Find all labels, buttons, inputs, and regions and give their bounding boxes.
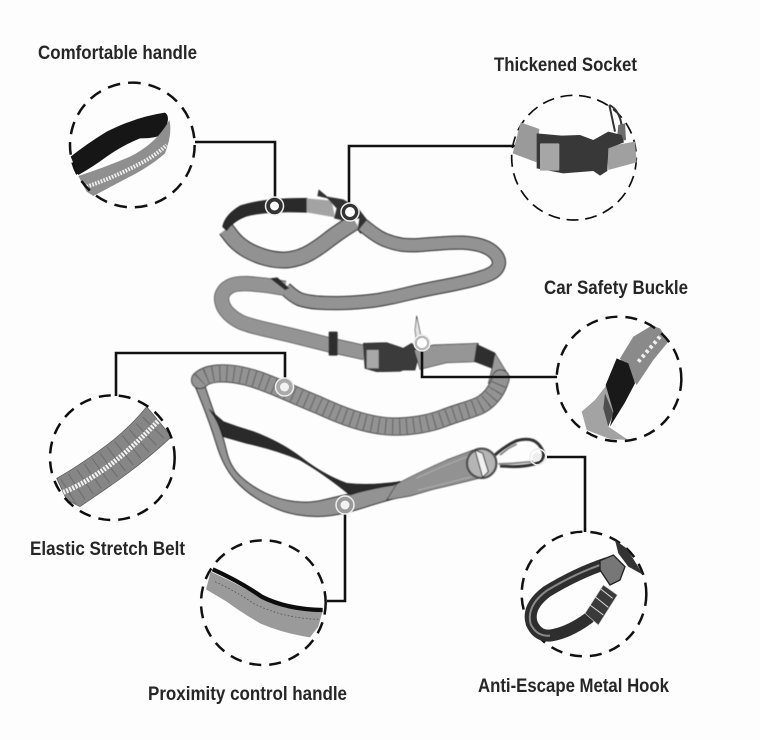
reflective strip xyxy=(87,145,167,187)
label: comfortable handle: Comfortable handle xyxy=(38,43,197,64)
line: thickened socket xyxy=(349,146,515,212)
thick strap end xyxy=(387,450,483,500)
carabiner xyxy=(495,439,544,467)
lower strap xyxy=(194,383,413,516)
upper strap and handle loop xyxy=(222,189,499,372)
label: car safety buckle: Car Safety Buckle xyxy=(544,278,688,299)
dashed ring xyxy=(201,540,326,665)
black clip xyxy=(606,358,635,427)
lower strap slit xyxy=(603,393,613,427)
strap stitching xyxy=(215,582,318,619)
gate ridges xyxy=(590,588,613,615)
line: car safety buckle xyxy=(422,346,557,377)
reflective strip xyxy=(63,418,161,492)
dark handle lining xyxy=(209,409,400,495)
long strap outline xyxy=(285,225,499,303)
detail: thickened socket xyxy=(512,95,637,220)
line: elastic belt xyxy=(116,353,285,396)
elastic body xyxy=(57,407,172,507)
connector lines xyxy=(116,142,585,601)
label: elastic stretch belt: Elastic Stretch Belt xyxy=(30,539,186,560)
carabiner highlight xyxy=(530,563,605,636)
line: metal hook xyxy=(547,457,585,532)
handle loop strap outline xyxy=(226,222,355,260)
buckle body xyxy=(537,132,624,176)
reflective marks xyxy=(638,337,660,362)
elastic belt fill xyxy=(200,373,501,427)
detail: proximity control handle xyxy=(201,540,326,665)
detail: comfortable handle xyxy=(70,83,195,207)
slider xyxy=(270,277,289,290)
marker: hook xyxy=(530,449,546,465)
carabiner highlight xyxy=(498,444,533,464)
loop plate xyxy=(617,123,626,142)
hook head xyxy=(600,555,625,585)
detail: elastic stretch belt xyxy=(50,395,175,520)
dashed ring xyxy=(70,83,195,207)
metal loop xyxy=(609,105,622,132)
handle black lining xyxy=(223,198,307,231)
strap end clip xyxy=(474,344,495,369)
long strap fill xyxy=(285,225,499,303)
metal pin xyxy=(415,316,423,342)
big buckle xyxy=(363,343,420,372)
label: proximity control handle: Proximity control handle xyxy=(148,684,347,705)
second strap outline xyxy=(222,284,365,353)
small buckle xyxy=(317,189,367,234)
label: thickened socket: Thickened Socket xyxy=(494,55,638,76)
elastic belt outline xyxy=(200,373,501,427)
carabiner frame xyxy=(531,563,607,636)
leash illustration xyxy=(194,189,544,516)
left strap xyxy=(513,122,539,162)
line: comfortable handle xyxy=(195,142,275,205)
strap tip xyxy=(615,540,643,575)
handle loop strap fill xyxy=(226,222,355,260)
elastic belt ribs xyxy=(200,373,501,427)
marker: elastic xyxy=(276,378,294,396)
gray strap xyxy=(206,572,323,637)
dashed ring xyxy=(50,395,175,520)
label: anti-escape metal hook: Anti-Escape Metal Hook xyxy=(478,676,669,697)
marker: socket xyxy=(341,203,359,221)
marker: proximity handle xyxy=(336,496,354,514)
ring plate xyxy=(475,450,488,477)
strap stitching xyxy=(417,455,478,490)
handle collar strap xyxy=(307,198,335,217)
strap tail to elastic xyxy=(488,353,508,383)
right strap piece xyxy=(414,343,478,369)
lower strap xyxy=(582,385,628,440)
gray strap xyxy=(78,120,170,196)
screw gate xyxy=(585,585,617,625)
buckle window xyxy=(367,350,379,368)
dashed ring xyxy=(557,317,681,441)
marker: buckle xyxy=(414,335,430,351)
detail: car safety buckle xyxy=(557,317,681,441)
metal ring xyxy=(467,449,496,478)
marker: handle xyxy=(266,197,284,215)
dashed ring xyxy=(522,532,646,656)
second strap fill xyxy=(222,284,365,353)
lower strap, elastic and carabiner xyxy=(194,353,544,516)
black lining xyxy=(213,569,323,610)
detail: anti-escape metal hook xyxy=(522,532,646,656)
black lining xyxy=(71,113,168,175)
right strap xyxy=(607,142,637,170)
location markers xyxy=(266,197,546,514)
dashed ring xyxy=(512,95,636,220)
line: proximity handle xyxy=(327,505,345,601)
black keeper xyxy=(329,332,338,356)
elastic ribs xyxy=(68,421,159,492)
upper strap xyxy=(620,326,668,385)
buckle window xyxy=(540,143,559,171)
